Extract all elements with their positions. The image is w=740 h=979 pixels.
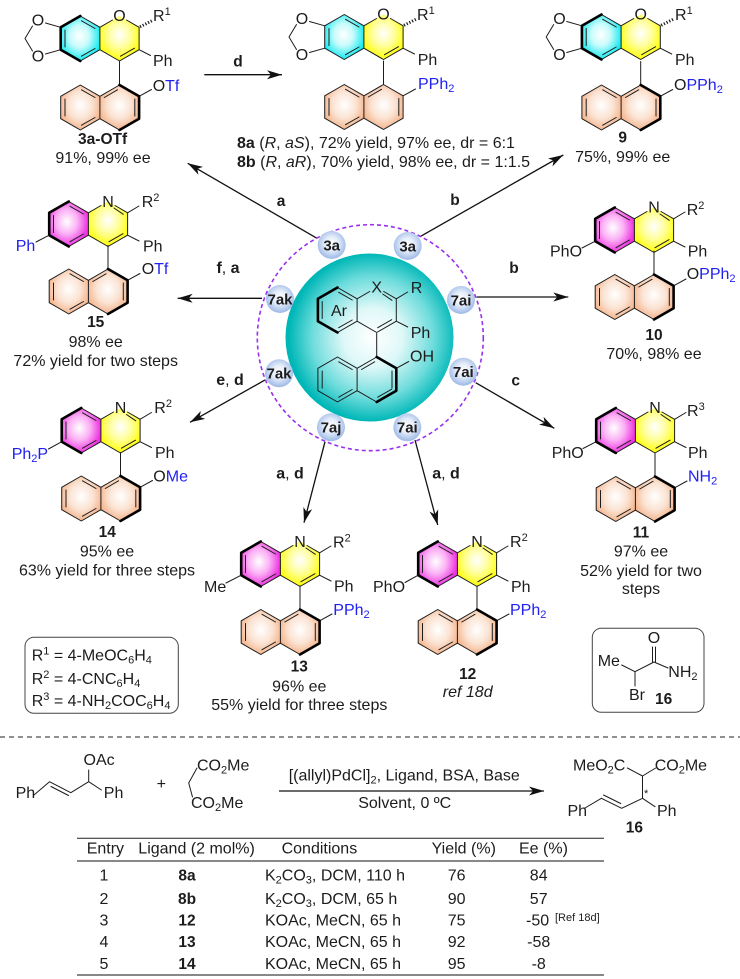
atom labels [12,398,188,486]
bubble: 7ak upper: 7ak [267,291,293,308]
reaction: product 16: Ph [657,803,677,820]
atom labels [204,532,370,621]
reaction: substrate acetate [16,752,123,802]
box: compound 16 structure: 2 [691,671,698,683]
table header: Conditions [282,840,357,857]
row 4: KOAc, MeCN, 65 h [265,934,401,951]
row 2: 2 [276,898,282,910]
bubble: 3a right [394,232,422,260]
compound caption: ref 18d [443,684,494,701]
atom labels: 2 [153,192,159,204]
atom labels: OTf [142,261,169,278]
ring system: quinoline [48,408,152,453]
legend box: R groups: H [153,693,164,710]
molecule 15 [13,192,178,370]
bubble: 7ai right upper [447,286,475,314]
atom labels: P [37,446,48,463]
row 5: -8 [532,956,546,973]
atom labels: R [142,194,153,211]
legend box: R groups: 1 [43,646,49,658]
ring system: benzodioxole chromene [25,16,152,61]
row 1: K [265,868,276,885]
compound caption: 97% ee [614,544,668,561]
atom labels: R [510,534,522,551]
compound caption: 91%, 99% ee [55,150,151,167]
molecule 14 [12,398,195,580]
atom labels: R [687,403,699,420]
row 3: KOAc, MeCN, 65 h [265,913,401,930]
ring system: naphthyl [49,246,140,314]
reaction arrow with conditions [279,768,544,812]
atom labels: OTf [153,78,180,95]
legend box: R groups: 6 [147,700,153,712]
row 2: , DCM, 65 h [312,891,397,908]
atom labels: Ph [418,52,437,69]
row 1: 84 [530,868,548,885]
reaction arrow with conditions: Solvent, 0 ºC [358,795,451,812]
reaction: dimethyl malonate: Me [221,795,243,812]
compound caption: 96% ee [272,679,327,696]
table rules [77,838,604,975]
bubble: 7ak lower: 7ak [266,366,292,383]
row 1: 3 [306,875,312,887]
ring system: naphthyl [241,586,332,654]
row 3 [100,912,600,930]
atom labels: Me [204,579,226,596]
ring system: naphthyl [61,62,152,130]
reaction: product 16: 2 [679,765,685,777]
compound caption: 14 [99,524,116,541]
atom labels: Ph [16,238,35,255]
row 4 [100,934,550,951]
legend box: R groups: R [32,693,43,710]
box: compound 16 structure: O [648,630,660,647]
atom labels: R [153,8,165,25]
table header [87,840,568,857]
reaction: product 16: C [614,758,625,775]
compound caption: 8a (R, aS), 72% yield, 97% ee, dr = 6:1 [237,135,515,152]
molecule 3a-OTf [25,6,180,167]
ring system: naphthyl [418,586,509,654]
atom labels: OMe [153,469,188,486]
atom labels [553,5,723,96]
molecule 9 [546,5,723,166]
compound caption [606,327,702,363]
reaction: dimethyl malonate: CO [191,795,215,812]
reaction arrow with conditions: 2 [370,775,377,787]
ring system: quinoline [36,202,139,246]
atom labels: Ph [12,446,31,463]
arrow: b to 10: b [509,260,519,277]
row 2: 90 [448,891,466,908]
atom labels: NH [688,469,711,486]
atom labels: N [471,534,483,551]
atom labels: Ph [675,52,695,69]
row 3: [Ref 18d] [555,912,600,924]
atom labels: O [296,11,308,28]
legend box: R groups: 4 [164,700,170,712]
bubble: 7ai bottom: 7ai [397,420,418,437]
reaction: substrate acetate: Ph [16,785,35,802]
atom labels: R [333,534,345,551]
reaction: dimethyl malonate: Me [227,758,249,775]
reaction: product 16: CO [655,758,679,775]
reaction: dimethyl malonate: CO [197,758,221,775]
atom labels: OPPh [674,77,717,94]
atom labels: O [553,47,566,64]
atom labels: O [634,6,647,24]
atom labels: PhO [373,579,405,596]
row 5: 95 [448,956,466,973]
compound caption [13,314,178,370]
arrow: b to 10 [477,260,568,297]
atom labels [552,400,717,488]
box: compound 16 structure: Me [598,653,620,670]
arrow: f, a to 15 [178,260,262,298]
table header: Ligand (2 mol%) [138,840,255,857]
compound caption [580,525,702,598]
molecule 10 [550,200,736,363]
compound caption [55,131,151,167]
core structure: Ar [331,303,348,320]
row 1: 8a [178,868,196,885]
atom labels: 2 [364,609,370,621]
atom labels: O [32,12,44,30]
atom labels: 3 [699,401,705,413]
atom labels: 1 [165,6,171,18]
bubble: 7ai right lower: 7ai [453,364,474,381]
reaction: product 16: 16 [626,820,643,837]
atom labels: O [113,8,126,25]
atom labels: 2 [522,532,528,544]
row 5: KOAc, MeCN, 65 h [265,956,401,973]
row 3: 3 [100,913,109,930]
ring system: naphthyl [595,251,686,320]
molecule 11 [552,400,717,598]
row 4: 92 [448,934,466,951]
atom labels: O [377,6,390,24]
row 1: 1 [100,868,109,885]
atom labels: R [687,202,698,219]
compound caption: 63% yield for three steps [19,563,195,580]
ring system: quinoline [582,208,685,252]
atom labels: Ph [334,579,354,596]
reaction: dimethyl malonate: 2 [215,802,221,814]
central core diagram [257,225,483,451]
arrow: a, d to 12 [415,440,460,525]
atom labels: N [648,200,660,216]
reaction: product 16: * [644,788,649,800]
atom labels [373,532,546,621]
legend box: R groups: 4 [146,655,152,667]
arrow: c to 11: c [511,373,520,390]
table header: Yield (%) [432,840,496,857]
dashed purple ring [257,225,483,451]
ring system: benzodioxole chromene [546,14,674,60]
compound caption: 9 [618,130,627,147]
reaction: substrate acetate: OAc [84,752,115,769]
atom labels: 2 [448,83,454,95]
legend box: R groups: R [32,671,43,688]
reaction: product 16: Me [685,758,707,775]
ring system: benzodioxole chromene [289,14,416,60]
atom labels: 2 [698,200,704,212]
arrow: b to 9: b [450,192,460,209]
arrow: e, d to 14: e, d [216,372,244,389]
legend box: R groups: COC [111,693,147,710]
row 1: 76 [448,868,466,885]
compound caption: 10 [645,327,663,344]
box: compound 16 structure: Br [629,687,646,704]
row 2: CO [282,891,306,908]
compound caption [19,524,195,580]
atom labels [16,192,169,278]
compound caption: 70%, 98% ee [606,346,702,363]
row 5: 5 [100,956,109,973]
atom labels: PhO [550,244,582,261]
atom labels: Ph [143,239,163,256]
legend box: R groups: 6 [128,655,134,667]
atom labels: N [649,400,661,417]
atom labels: N [115,400,126,417]
reaction arrow with conditions: , Ligand, BSA, Base [377,768,520,785]
arrow: a, d to 12: a, d [432,465,460,482]
core structure: R [411,280,422,297]
atom labels: PPh [510,602,540,619]
row 2: 2 [100,891,109,908]
atom labels: Ph [688,244,707,261]
row 3: -50 [526,913,549,930]
row 1: 2 [276,875,282,887]
reaction: product 16 [568,758,707,837]
reaction: dimethyl malonate: 2 [221,765,227,777]
row 4: 4 [100,934,109,951]
arrow: e, d to 14 [190,372,265,422]
ring system: quinoline [583,408,686,453]
atom labels: 2 [729,273,736,285]
arrow: a to 3a-OTf: a [277,193,286,210]
bubble: 7aj [317,413,345,441]
arrow: a, d to 13: a, d [276,465,304,482]
results table [77,838,604,975]
atom labels: O [32,48,44,66]
bubble: 7ak upper [266,285,294,313]
atom labels: Ph [688,445,708,462]
row 2: K [265,891,276,908]
ring system: quinoline [226,542,331,586]
atom labels: N [294,534,306,551]
arrow: 3a-OTf to 8 with reagent d [204,54,282,75]
atom labels: PPh [418,76,448,93]
atom labels: R [154,400,166,417]
bubble: 7ai right upper: 7ai [451,292,471,309]
plus sign: + [157,776,166,793]
bubble: 7ak lower [265,359,293,387]
row 1 [100,868,548,887]
compound caption [443,666,494,701]
atom labels: R [675,7,687,24]
legend box: R groups: 6 [117,678,123,690]
legend box: R groups: 2 [43,669,49,681]
bubble: 3a left [318,231,346,259]
atom labels: 1 [429,5,435,17]
row 2: 57 [530,891,548,908]
reaction arrow with conditions: [(allyl)PdCl] [289,768,370,785]
atom labels: PPh [333,602,364,619]
atom labels: 2 [711,476,717,488]
atom labels [550,200,736,285]
compound caption: 15 [87,314,105,331]
bubble: 7ai right lower [449,358,477,386]
atom labels: R [417,7,429,24]
bubble: 3a right: 3a [399,238,417,255]
compound caption: 13 [291,659,308,676]
row 3: 75 [448,913,466,930]
legend box: R groups: 2 [105,700,111,712]
compound caption: 75%, 99% ee [575,149,670,166]
atom labels: 2 [166,398,172,410]
row 1: , DCM, 110 h [312,868,405,885]
atom labels: Ph [511,579,531,596]
ring system: naphthyl [582,62,673,130]
legend box: R groups: = 4-NH [49,693,105,710]
legend box: R groups: = 4-MeOC [49,648,128,665]
compound caption: 98% ee [69,334,123,351]
arrow: c to 11 [476,373,554,428]
atom labels: N [102,194,114,211]
compound caption: 55% yield for three steps [211,697,387,714]
atom labels: 2 [717,84,723,96]
compound caption: 3a-OTf [78,131,128,148]
table header: Ee (%) [519,840,568,857]
compound caption: 8b (R, aR), 70% yield, 98% ee, dr = 1:1.5 [237,154,530,171]
reaction: substrate acetate: Ph [104,785,123,802]
bubble: 3a left: 3a [323,237,341,254]
atom labels: 2 [345,532,351,544]
reaction: dimethyl malonate [189,758,249,814]
atom labels: 1 [687,5,693,17]
atom labels: 2 [540,609,546,621]
arrow: a, d to 13 [276,442,325,523]
legend box: R groups: H [123,671,134,688]
molecule 13 [204,532,387,714]
core structure [318,280,434,402]
row 2: 8b [178,891,196,908]
ring system: naphthyl [325,61,416,130]
bubble: 7ai bottom [393,413,421,441]
legend box: R groups: = 4-CNC [49,671,117,688]
legend box: R groups: 3 [43,691,49,703]
compound caption: 11 [633,525,650,542]
compound caption [211,659,387,714]
legend box: R groups [25,637,178,713]
bubble: 7aj: 7aj [321,420,341,437]
molecule 12 [373,532,546,701]
compound caption: 95% ee [80,544,134,561]
row 2: 3 [306,898,312,910]
compound caption: steps [622,581,660,598]
row 5 [100,956,546,973]
core structure: X [371,280,382,297]
atom labels: O [553,11,566,28]
ring system: naphthyl [62,452,153,521]
arrow: a to 3a-OTf [188,163,317,238]
row 2 [100,891,548,910]
box: compound 16 structure: 16 [655,691,673,708]
legend box: R groups: 4 [134,678,140,690]
core structure: OH [410,349,434,366]
legend box: R groups: R [32,648,43,665]
arrow: b to 9 [420,155,563,237]
atom labels: 2 [31,453,37,465]
row 4: -58 [527,934,550,951]
arrow: f, a to 15: f, a [216,260,240,277]
compound caption [237,135,530,171]
ring system: naphthyl [596,453,687,522]
teal sphere [286,254,454,422]
atom labels: OPPh [687,266,729,283]
atom labels: Ph [155,445,175,462]
row 4: 13 [178,934,196,951]
atom labels: O [296,47,308,64]
row 5: 14 [178,956,196,973]
reaction: product 16: MeO [573,758,608,775]
core structure: Ph [411,325,430,342]
row 1: CO [282,868,306,885]
atom labels [32,6,180,95]
box: compound 16 structure: NH [668,664,691,681]
reaction: product 16: 2 [608,765,614,777]
box: compound 16 structure [592,628,704,712]
compound caption: 12 [459,666,476,683]
reaction: product 16: Ph [568,803,587,820]
atom labels: PhO [552,445,584,462]
compound caption: 72% yield for two steps [13,353,178,370]
row 3: 12 [178,913,196,930]
atom labels: Ph [153,53,173,70]
table header: Entry [87,840,124,857]
legend box: R groups: H [134,648,146,665]
molecule 8a/8b [237,5,530,171]
atom labels [296,5,454,95]
compound caption [575,130,670,166]
compound caption: 52% yield for two [580,563,702,580]
arrow: 3a-OTf to 8 with reagent d: d [233,54,243,71]
ring system: quinoline [405,542,508,586]
